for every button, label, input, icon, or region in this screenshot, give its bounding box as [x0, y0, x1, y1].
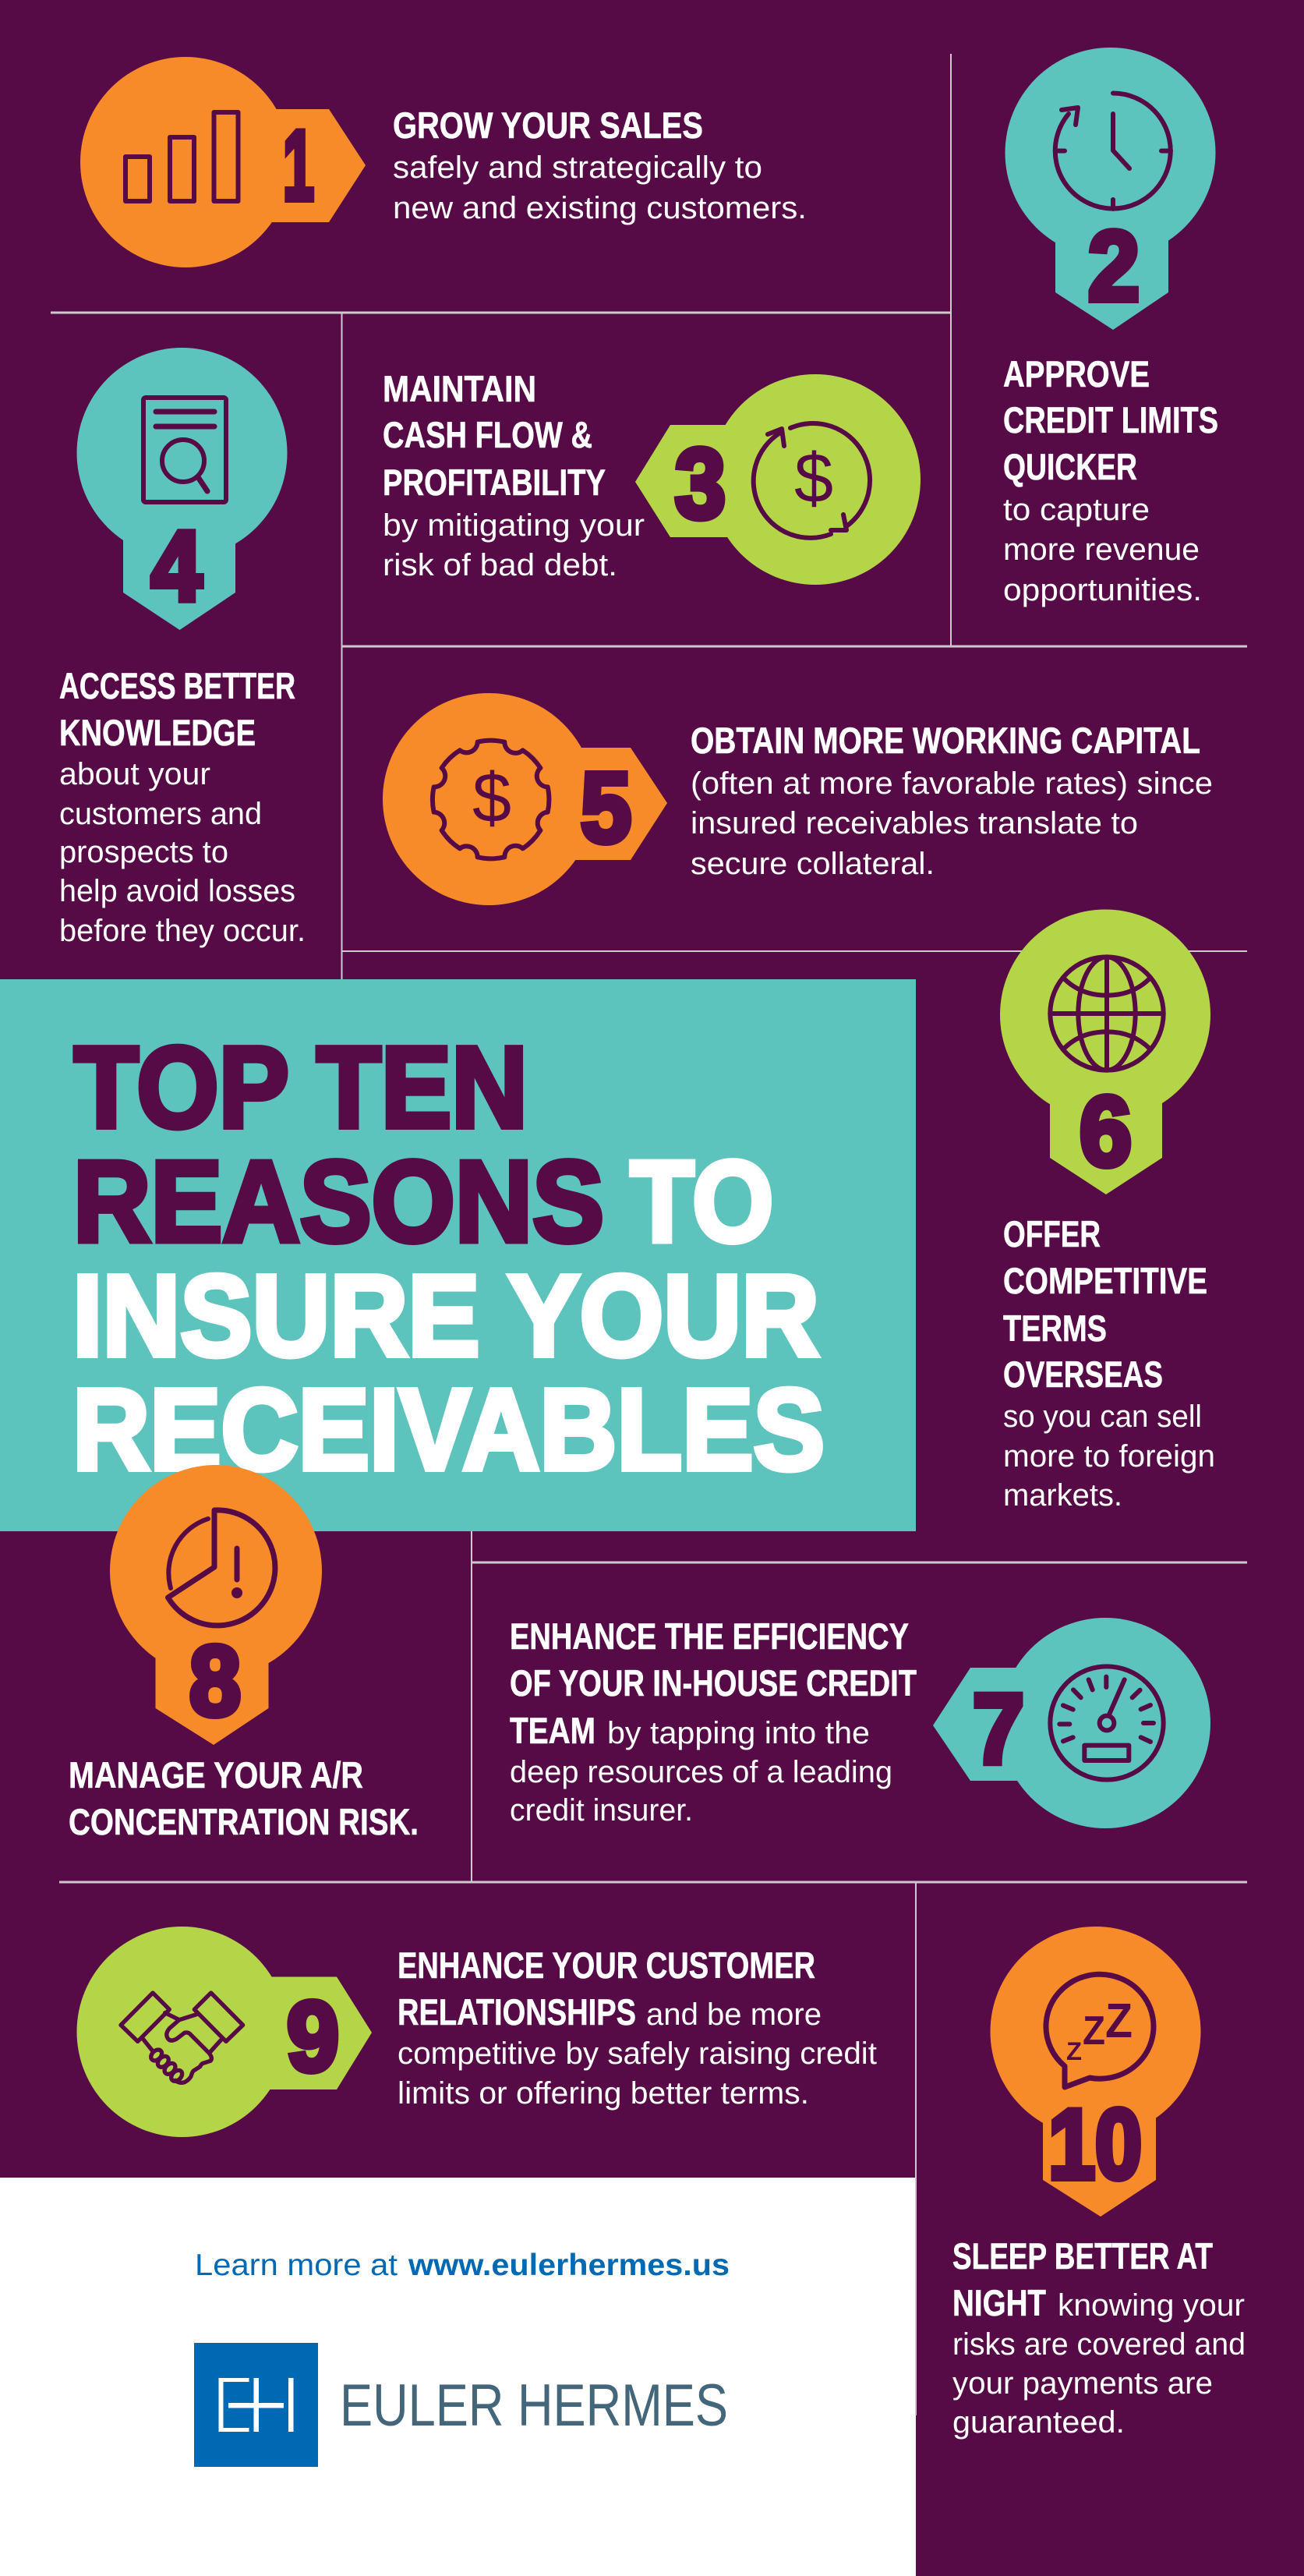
text: reason 9: RELATIONSHIPS: [398, 1991, 636, 2033]
icon: bar chart: [125, 112, 239, 201]
icon: dollar sign: $: [472, 759, 511, 837]
badge 1: [80, 57, 366, 267]
text: reason 1: [393, 104, 807, 225]
badge 5: [383, 693, 667, 905]
text: reason 6: TERMS: [1003, 1307, 1107, 1349]
text: reason 9: limits or offering better terms.: [398, 2076, 809, 2111]
text: reason 2: more revenue: [1003, 533, 1200, 567]
text: reason 6: COMPETITIVE: [1003, 1260, 1207, 1301]
panel: reason 6 competitive terms overseas: [1000, 909, 1215, 1513]
text: reason 1: new and existing customers.: [393, 191, 807, 225]
text: reason 6: OFFER: [1003, 1213, 1101, 1254]
text: reason 5: [691, 720, 1213, 881]
number 7: 7: [973, 1673, 1024, 1784]
title: INSURE YOUR: [72, 1252, 819, 1380]
text: reason 4: help avoid losses: [59, 874, 295, 908]
icon: dollar sign: $: [794, 440, 833, 518]
learn more link text: [195, 2249, 730, 2282]
text: reason 10: your payments are: [952, 2366, 1213, 2401]
icon: speech bubble with sleep letters: Z: [1083, 2008, 1105, 2054]
number 2: 2: [1088, 211, 1140, 321]
text: reason 2: APPROVE: [1003, 353, 1150, 395]
text: reason 9: competitive by safely raising credit: [398, 2036, 877, 2071]
text: reason 4: before they occur.: [59, 914, 306, 948]
panel: reason 3 maintain cash flow: [383, 368, 921, 585]
text: reason 1: GROW YOUR SALES: [393, 104, 703, 146]
panel: title block: [0, 979, 916, 1531]
icon: clock: [1055, 94, 1171, 209]
text: reason 2: QUICKER: [1003, 446, 1137, 487]
text: reason 5: insured receivables translate to: [691, 806, 1138, 840]
badge 10: [990, 1927, 1200, 2217]
text: reason 2: to capture: [1003, 493, 1150, 527]
icon: speedometer: [1050, 1666, 1164, 1780]
panel: reason 2 approve credit limits: [1003, 48, 1218, 607]
text: reason 3: risk of bad debt.: [383, 548, 617, 582]
text: reason 9: and be more: [646, 1997, 822, 2032]
title: RECEIVABLES: [72, 1366, 825, 1494]
text: reason 9: [398, 1944, 877, 2111]
text: reason 5: (often at more favorable rates) since: [691, 766, 1213, 801]
text: reason 4: KNOWLEDGE: [59, 712, 256, 753]
text: reason 7: by tapping into the: [607, 1716, 870, 1750]
title: [72, 1023, 825, 1494]
learn more link text: Learn more at: [195, 2249, 398, 2282]
icon: speech bubble with sleep letters: Z: [1066, 2037, 1082, 2065]
text: reason 4: customers and: [59, 797, 262, 831]
text: reason 8: [69, 1754, 419, 1842]
panel: reason 9 customer relationships: [76, 1927, 877, 2137]
badge 3: [635, 374, 921, 585]
panel: reason 1 grow your sales: [80, 57, 807, 267]
logo mark EH: [194, 2343, 318, 2467]
text: reason 9: ENHANCE YOUR CUSTOMER: [398, 1944, 815, 1986]
text: reason 7: [510, 1615, 917, 1828]
icon: globe: [1050, 957, 1164, 1070]
text: reason 7: ENHANCE THE EFFICIENCY: [510, 1615, 909, 1657]
text: reason 6: [1003, 1213, 1215, 1513]
white footer panel: [0, 2178, 916, 2576]
title: TOP TEN: [74, 1023, 528, 1152]
text: reason 7: TEAM: [510, 1710, 595, 1751]
text: reason 3: PROFITABILITY: [383, 462, 606, 503]
text: reason 2: [1003, 353, 1218, 607]
text: reason 6: OVERSEAS: [1003, 1353, 1163, 1395]
text: reason 1: safely and strategically to: [393, 150, 762, 185]
badge 7: [933, 1618, 1210, 1828]
text: reason 4: ACCESS BETTER: [59, 665, 295, 706]
panel: reason 4 access better knowledge: [59, 348, 306, 948]
number 8: 8: [189, 1626, 241, 1736]
text: reason 6: so you can sell: [1003, 1399, 1202, 1434]
text: reason 10: guaranteed.: [952, 2405, 1125, 2440]
text: reason 3: [383, 368, 645, 582]
icon: gear: [433, 741, 549, 858]
panel: reason 8 manage concentration risk: [69, 1465, 419, 1842]
number 4: 4: [151, 511, 202, 621]
number 5: 5: [581, 752, 631, 863]
text: reason 3: MAINTAIN: [383, 368, 536, 409]
text: reason 2: opportunities.: [1003, 573, 1202, 607]
badge 2: [1005, 48, 1216, 330]
badge 9: [76, 1927, 372, 2137]
badge 4: [76, 348, 287, 630]
panel: footer call to action and logo: [194, 2249, 730, 2467]
text: reason 2: CREDIT LIMITS: [1003, 399, 1218, 441]
icon: document magnifier: [143, 398, 226, 502]
text: reason 6: more to foreign: [1003, 1439, 1215, 1474]
text: reason 7: OF YOUR IN-HOUSE CREDIT: [510, 1662, 917, 1704]
text: reason 10: NIGHT: [952, 2282, 1046, 2323]
number 1: 1: [283, 110, 314, 221]
badge 8: [110, 1465, 322, 1745]
panel: reason 7 efficiency of credit team: [510, 1615, 1210, 1828]
learn more link text: www.eulerhermes.us: [408, 2249, 730, 2282]
panel: reason 10 sleep better: [952, 1927, 1246, 2440]
badge 6: [1000, 909, 1210, 1194]
text: reason 4: prospects to: [59, 835, 228, 869]
title: TO: [630, 1138, 773, 1266]
text: reason 3: by mitigating your: [383, 508, 645, 543]
logo wordmark: EULER HERMES: [340, 2373, 728, 2439]
icon: speech bubble with sleep letters: [1046, 1974, 1154, 2087]
text: reason 10: [952, 2235, 1246, 2440]
number 6: 6: [1080, 1076, 1132, 1187]
number 10: 10: [1048, 2089, 1142, 2199]
text: reason 5: secure collateral.: [691, 847, 935, 881]
text: reason 10: risks are covered and: [952, 2327, 1246, 2362]
title: REASONS: [73, 1138, 604, 1266]
icon: circular arrows dollar: [754, 423, 870, 538]
text: reason 8: MANAGE YOUR A/R: [69, 1754, 363, 1796]
text: reason 7: credit insurer.: [510, 1793, 693, 1828]
text: reason 4: [59, 665, 306, 948]
panel: reason 5 obtain working capital: [383, 693, 1213, 905]
text: reason 6: markets.: [1003, 1478, 1122, 1513]
text: reason 10: SLEEP BETTER AT: [952, 2235, 1213, 2277]
icon: pie chart alert: [168, 1510, 275, 1626]
text: reason 4: about your: [59, 757, 210, 791]
text: reason 8: CONCENTRATION RISK.: [69, 1801, 419, 1842]
text: reason 5: OBTAIN MORE WORKING CAPITAL: [691, 720, 1200, 761]
number 9: 9: [287, 1981, 339, 2092]
text: reason 7: deep resources of a leading: [510, 1755, 892, 1789]
icon: speech bubble with sleep letters: Z: [1105, 1994, 1133, 2048]
number 3: 3: [675, 428, 726, 539]
text: reason 10: knowing your: [1058, 2288, 1245, 2323]
icon: handshake: [121, 1993, 243, 2083]
text: reason 3: CASH FLOW &: [383, 414, 592, 455]
